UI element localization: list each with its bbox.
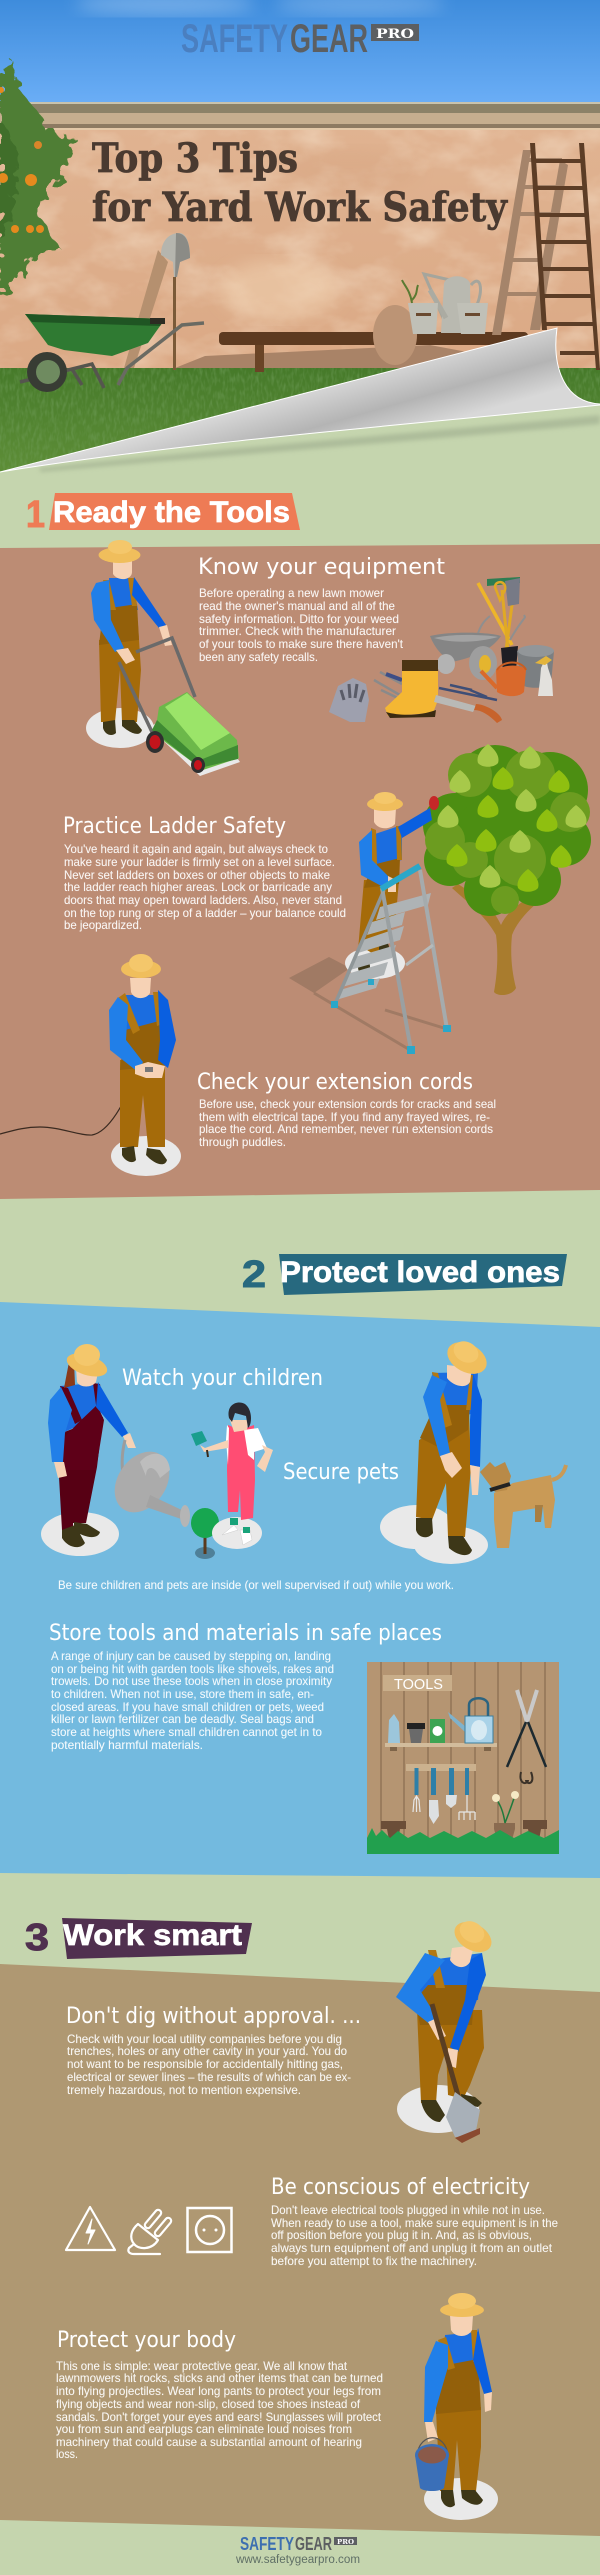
text: be conscious of electricity: always turn equipment off and unplug it from an outlet <box>271 2242 553 2255</box>
watering cans and plant <box>373 274 488 365</box>
footer logo: PRO <box>337 2538 354 2546</box>
heading: section 1: 1 <box>26 494 45 536</box>
text: store tools: closed areas. If you have small children or pets, weed <box>51 1701 324 1714</box>
heading: check your extension cords: Check your extension cords <box>197 1069 473 1095</box>
title <box>92 135 509 231</box>
text: practice ladder safety: You've heard it again and again, but always check to <box>64 843 328 856</box>
text: practice ladder safety <box>64 843 346 932</box>
sign <box>383 1675 452 1693</box>
title: Top 3 Tips <box>92 135 298 182</box>
text: don't dig: tremely hazardous, not to mention expensive. <box>67 2084 301 2097</box>
heading: section 1 <box>26 493 300 536</box>
text: don't dig: trenches, holes or any other cavity in your yard. You do <box>67 2045 347 2058</box>
text: practice ladder safety: on the top rung or step of a ladder – your balance could <box>64 907 346 920</box>
heading: section 3: 3 <box>25 1917 49 1959</box>
text: practice ladder safety: Never set ladders on boxes or other objects to make <box>64 869 330 882</box>
text: know your equipment: safety information. Ditto for your weed <box>199 613 399 626</box>
text: check your extension cords <box>199 1098 496 1149</box>
illustration: woman with watering can <box>41 1344 136 1556</box>
heading: protect your body: Protect your body <box>57 2327 236 2353</box>
footer logo: GEAR <box>295 2534 332 2554</box>
text: don't dig: Check with your local utility companies before you dig <box>67 2033 342 2046</box>
logo: PRO <box>376 27 414 42</box>
shelf items <box>385 1698 497 1751</box>
text: know your equipment: Before operating a new lawn mower <box>199 587 384 600</box>
text: know your equipment: trimmer. Check with the manufacturer <box>199 625 396 638</box>
shears <box>507 1690 546 1783</box>
panel: section 2 background <box>0 1302 600 1878</box>
heading: secure pets: Secure pets <box>283 1459 399 1485</box>
illustration: garden tools <box>329 577 554 723</box>
panel: section 3 background <box>0 1964 600 2536</box>
orange tree <box>0 62 74 300</box>
text: store tools: killer or lawn fertilizer can be deadly. Seal bags and <box>51 1713 314 1726</box>
illustration: girl with rake <box>191 1403 273 1549</box>
logo: SAFETY <box>181 17 288 61</box>
text: know your equipment: of your tools to make sure there haven't <box>199 638 404 651</box>
shovel <box>124 233 190 370</box>
text: protect your body: sandals. Don't forget your eyes and ears! Sunglasses will protect <box>56 2411 382 2424</box>
heading: section 2: Protect loved ones <box>280 1256 560 1289</box>
text: be conscious of electricity: Don't leave electrical tools plugged in while not in use. <box>271 2204 545 2217</box>
heading: section 1: Ready the Tools <box>53 496 290 529</box>
illustration: small tree <box>191 1508 219 1559</box>
icon: plug <box>128 2209 172 2254</box>
illustration: man with dog <box>380 1336 566 1564</box>
text: check your extension cords: Before use, check your extension cords for cracks and seal <box>199 1098 496 1111</box>
footer url: www.safetygearpro.com <box>235 2554 360 2566</box>
text: protect your body: flying objects and wear non-slip, closed toe shoes instead of <box>56 2398 361 2411</box>
text: know your equipment: been any safety recalls. <box>199 651 318 664</box>
heading: section 2 <box>242 1254 567 1296</box>
grass <box>0 368 600 478</box>
text: store tools: on or being hit with garden tools like shovels, rakes and <box>51 1663 334 1676</box>
pots and grass <box>367 1791 559 1854</box>
heading: watch your children: Watch your children <box>122 1365 323 1391</box>
text: protect your body: This one is simple: wear protective gear. We all know that <box>56 2360 348 2373</box>
text: protect your body: lawnmowers hit rocks, sticks and other items that can be turned <box>56 2372 383 2385</box>
footer logo <box>240 2534 357 2554</box>
heading: section 3: Work smart <box>63 1919 242 1952</box>
text: don't dig: not want to be responsible for accidentally hitting gas, <box>67 2058 343 2071</box>
footer logo: SAFETY <box>240 2534 294 2554</box>
text: know your equipment: read the owner's manual and all of the <box>199 600 395 613</box>
text: be conscious of electricity: off position before you plug it in. And, as is obvious, <box>271 2229 532 2242</box>
icon: socket <box>188 2208 232 2252</box>
text: store tools: potentially harmful materials. <box>51 1739 203 1752</box>
text: be conscious of electricity: before you attempt to fix the machinery. <box>271 2255 477 2268</box>
text: children and pets: Be sure children and pets are inside (or well supervised if out) while you work. <box>58 1579 454 1592</box>
icon: high voltage warning <box>66 2207 115 2250</box>
text: practice ladder safety: doors that may open toward ladders. Also, never stand <box>64 894 342 907</box>
heading: don't dig: Don't dig without approval. ... <box>66 2003 361 2029</box>
page curl <box>0 328 600 472</box>
illustration: ladder and gardener <box>289 792 451 1054</box>
text: check your extension cords: them with electrical tape. If you find any frayed wires, re- <box>199 1111 490 1124</box>
hanging tools <box>406 1764 476 1824</box>
text: store tools <box>51 1650 334 1752</box>
illustration: gardener with mower <box>86 540 240 776</box>
sign: TOOLS <box>394 1676 443 1693</box>
text: protect your body: you from sun and earplugs can eliminate loud noises from <box>56 2423 352 2436</box>
text: be conscious of electricity <box>271 2204 558 2268</box>
text: store tools: store at heights where small children cannot get in to <box>51 1726 322 1739</box>
text: practice ladder safety: the ladder reach higher areas. Lock or barricade any <box>64 881 332 894</box>
text: protect your body: loss. <box>56 2448 78 2461</box>
illustration: tree <box>423 744 591 995</box>
text: protect your body: into flying projectiles. Wear long pants to protect your legs from <box>56 2385 381 2398</box>
page curl shadow <box>40 415 600 472</box>
hero scene <box>0 0 600 478</box>
text: practice ladder safety: make sure your ladder is firmly set on a level surface. <box>64 856 335 869</box>
bench <box>175 332 528 372</box>
green page under curl <box>0 405 600 560</box>
illustration: gardener digging <box>396 1916 497 2143</box>
text: be conscious of electricity: When ready to use a tool, make sure equipment is in the <box>271 2217 558 2230</box>
text: don't dig: electrical or sewer lines – the results of which can be ex- <box>67 2071 351 2084</box>
text: don't dig <box>67 2033 351 2097</box>
heading: practice ladder safety: Practice Ladder Safety <box>63 813 286 839</box>
text: store tools: trowels. Do not use these tools when in close proximity <box>51 1675 332 1688</box>
garden wall <box>0 102 600 370</box>
text: practice ladder safety: be jeopardized. <box>64 919 142 932</box>
heading: store tools: Store tools and materials in safe places <box>49 1620 442 1646</box>
wheelbarrow <box>20 314 204 392</box>
text: check your extension cords: through puddles. <box>199 1136 286 1149</box>
sky <box>0 0 600 104</box>
text: protect your body: machinery that could cause a substantial amount of hearing <box>56 2436 362 2449</box>
panel: section 1 background <box>0 544 600 1199</box>
heading: section 2: 2 <box>242 1254 266 1296</box>
text: store tools: A range of injury can be caused by stepping on, landing <box>51 1650 331 1663</box>
illustration: tool board <box>367 1662 559 1854</box>
text: store tools: to children. When not in use, store them in safe, en- <box>51 1688 314 1701</box>
heading: be conscious of electricity: Be conscious of electricity <box>271 2174 530 2200</box>
leaning ladder <box>492 143 600 370</box>
logo: GEAR <box>290 17 368 61</box>
illustration: watering can <box>103 1440 190 1527</box>
illustration: gardener with bucket <box>415 2293 498 2520</box>
heading: know your equipment: Know your equipment <box>198 554 445 580</box>
text: protect your body <box>56 2360 383 2461</box>
logo <box>181 17 419 61</box>
text: know your equipment <box>199 587 404 664</box>
text: check your extension cords: place the cord. And remember, never run extension cords <box>199 1123 493 1136</box>
title: for Yard Work Safety <box>92 184 509 231</box>
illustration: gardener with extension cord <box>0 954 181 1176</box>
heading: section 3 <box>25 1917 252 1959</box>
